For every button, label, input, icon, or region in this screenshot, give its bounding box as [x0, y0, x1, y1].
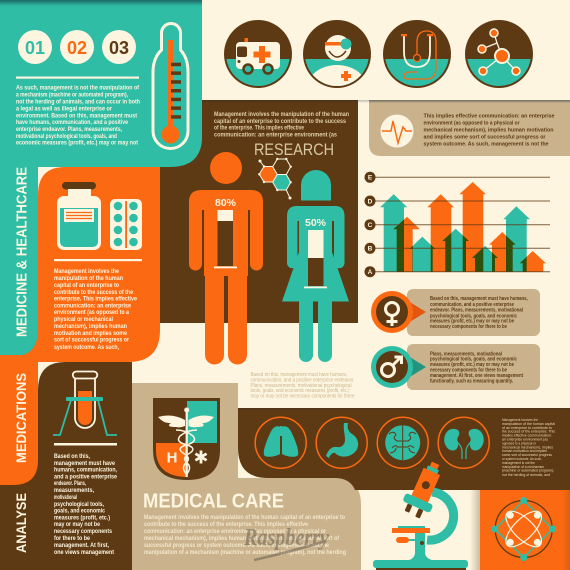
icon: test tube [53, 372, 117, 435]
intro text: have humans, communication, and a positive [16, 119, 128, 126]
badge: caduceus shield [153, 398, 220, 480]
male callout text [430, 351, 523, 384]
organs band text: (machine or automated program), [502, 469, 554, 473]
intro text: economic measures (profit, etc.) may or may not [16, 140, 139, 147]
chart grid and axis badges: E [368, 175, 373, 182]
female callout text: communication, and a positive enterprise [430, 302, 514, 308]
intro text: not the herding of animals, and can occur in both [16, 99, 140, 106]
analyse text: management. At first, [54, 542, 109, 549]
research intro text: of the enterprise. This implies effective [214, 124, 304, 131]
organs band text: manipulation of the human capital [502, 422, 555, 426]
icon: atom [492, 497, 556, 561]
medical care text: successful progress or system outcome. As such, management is not the [144, 542, 329, 549]
female callout text: psychological tools, goals, and economic [430, 313, 517, 319]
panel: top teal intro [0, 0, 202, 167]
panel: research brown [150, 100, 358, 323]
ECG card text: This implies effective communication: an enterprise [424, 114, 554, 120]
organs band text: of an enterprise to contribute to [502, 426, 552, 430]
medicine text: mechanism), implies human [54, 323, 127, 330]
male callout text: functionally, such as measuring quantity. [430, 378, 513, 384]
divider line [16, 76, 139, 79]
analyse text: and a positive enterprise [54, 474, 117, 480]
analyse text: endeavor. Plans, [54, 480, 86, 487]
medicine text: enterprise. This implies effective [54, 296, 137, 302]
number badge 01 [18, 30, 52, 64]
text below figures [250, 372, 354, 400]
ECG card text: environment (as opposed to a physical or [424, 121, 520, 127]
male callout text: psychological tools, goals, and economic [430, 357, 517, 363]
chart grid and axis badges: D [368, 198, 373, 205]
medicine text: sort of successful progress or [54, 336, 129, 344]
panel: orange medicine [0, 167, 160, 362]
medicine text: manipulation of the human [54, 275, 123, 282]
analyse text: goals, and economic [54, 508, 105, 514]
male callout text: Plans, measurements, motivational [430, 351, 502, 357]
text below figures: communication, and a positive enterprise endeavor. [250, 378, 354, 384]
number badge 02: 02 [67, 38, 87, 58]
medicine text: physical or mechanical [54, 316, 113, 323]
panel: organs band [238, 408, 570, 490]
letter H: H [167, 450, 177, 466]
label: medicine and healthcare: MEDICINE & HEALTHCARE [14, 167, 30, 337]
number badge 03: 03 [109, 38, 129, 58]
intro text: enterprise endeavor. Plans, measurements, [16, 126, 122, 133]
organs band text: manipulation of a mechanism [502, 465, 544, 469]
panel: brown analyse [0, 355, 132, 570]
female callout text: Based on this, management must have humans, [430, 296, 528, 302]
panel: microscope [361, 457, 480, 570]
ECG card text: system outcome. As such, management is not the [424, 141, 548, 147]
female callout text [430, 296, 528, 330]
medicine text: capital of an enterprise to [54, 282, 119, 289]
text below figures: may or may not be necessary components for there [250, 394, 354, 400]
medical care text: manipulation of a mechanism (machine or automated program), not the herding [144, 549, 346, 556]
organs band text: some sort of successful progress [502, 453, 552, 457]
icon: microscope [373, 457, 468, 570]
organs band text: implies effective communication: [502, 434, 552, 438]
icon: caduceus [158, 408, 214, 477]
medicine text: system outcome. As such, [54, 344, 119, 351]
research intro text: capital of an enterprise to contribute to the success [214, 118, 346, 125]
icon: stomach [316, 417, 367, 468]
organs band text: the success of the enterprise. This [502, 430, 555, 434]
heading: medical care: MEDICAL CARE [143, 490, 284, 513]
icon: stethoscope [383, 20, 451, 88]
icon: kidneys [438, 417, 489, 468]
intro text: motivational psychological tools, goals, and [16, 133, 117, 140]
analyse text: may or may not be [54, 521, 100, 528]
ECG card text: and implies some sort of successful progress or [424, 134, 546, 140]
panel: teal side tab [0, 160, 38, 357]
icon: hexagon molecule [258, 158, 292, 200]
analyse text: humans, communication, [54, 466, 117, 474]
panel: ECG card [369, 100, 570, 156]
number badge 02 [60, 30, 94, 64]
organs band text: an enterprise environment (as [502, 438, 548, 442]
icon: ambulance [224, 20, 292, 88]
panel: orange medications tab [0, 355, 38, 485]
icon: male symbol [382, 357, 402, 376]
organs band text: opposed to a physical or [502, 441, 537, 445]
analyse text: motivational [54, 494, 77, 501]
icon: medicine bottle [57, 182, 101, 250]
icon: pill pack [110, 199, 142, 250]
divider line [54, 259, 142, 261]
medicine text: motivation and implies some [54, 330, 127, 337]
icon: asterisk [195, 450, 207, 464]
text below figures: tools, goals, and economic measures (profit, etc.) [250, 388, 350, 394]
chart grid and axis badges: C [368, 222, 373, 229]
chart grid and axis badges: A [368, 269, 373, 276]
number badge 03 [102, 30, 136, 64]
analyse text: necessary components [54, 528, 112, 535]
research intro text: communication: an enterprise environment (as [214, 131, 337, 138]
number badge 01: 01 [25, 38, 45, 58]
icon: lungs [255, 417, 306, 468]
medicine text [54, 268, 137, 351]
icon: thermometer [153, 24, 188, 148]
organs band text: Management involves the [502, 418, 538, 422]
icon: doctor [303, 20, 371, 88]
analyse text: psychological tools, [54, 501, 104, 508]
medicine text: contribute to the success of the [54, 289, 133, 296]
text below figures: Based on this, management must have humans, [250, 372, 348, 378]
panel: tan lower [132, 383, 361, 570]
intro text: environment. Based on this, management must [16, 112, 138, 119]
medical care text: Management involves the manipulation of the human capital of an enterprise to [144, 514, 345, 521]
panel: atom [480, 490, 570, 570]
figure: woman 50%: 50% [305, 217, 327, 229]
chart grid and axis badges: B [368, 246, 373, 253]
figure: woman 50% [282, 170, 349, 362]
medical care text: mechanical mechanism), implies human motivation and implies some sort of [144, 535, 340, 542]
intro text [16, 85, 140, 147]
medicine text: communication: an enterprise [54, 302, 131, 310]
organs band text [502, 418, 555, 477]
ECG card text: mechanical mechanism), implies human motivation [424, 128, 554, 134]
male callout text: necessary components for there to be [430, 367, 507, 373]
medicine text: environment (as opposed to a [54, 309, 129, 316]
research intro text: Management involves the manipulation of the human [214, 111, 349, 118]
ECG card text [424, 114, 554, 147]
callout: male [371, 344, 540, 390]
female callout text: endeavor. Plans, measurements, motivational [430, 308, 523, 314]
label: medications: MEDICATIONS [13, 373, 29, 463]
icon: female symbol [386, 302, 398, 326]
icon: brain [377, 417, 428, 468]
medical care text [144, 514, 346, 556]
bar chart: arrows [364, 172, 550, 277]
medicine text: Management involves the [54, 268, 119, 275]
medical care text: contribute to the success of the enterprise. This implies effective [144, 521, 308, 528]
intro text: a mechanism (machine or automated program), [16, 92, 128, 99]
organs band text: not the herding of animals, and [502, 473, 550, 477]
chart grid and axis badges [364, 172, 550, 277]
female callout text: measures (profit, etc.) may or may not be [430, 318, 514, 324]
analyse text: for there to be [54, 535, 90, 542]
intro text: a legal as well as illegal enterprise or [16, 106, 112, 113]
panel: top icon strip [224, 20, 533, 88]
text below figures: Plans, measurements, motivational psychological [250, 383, 352, 389]
icon: molecule [465, 20, 533, 88]
intro text: As such, management is not the manipulation of [16, 85, 140, 92]
figure: man 80%: 80% [215, 197, 237, 209]
research intro text [214, 111, 349, 138]
shadow under top strip [202, 100, 570, 103]
male callout text: management. At first, one views management [430, 373, 523, 379]
organs band text: management is not the [502, 461, 535, 465]
watermark: Raspberry [243, 525, 329, 551]
analyse text: measurements, [54, 487, 94, 494]
organs band text: or system outcome. As such, [502, 457, 542, 461]
analyse text [54, 453, 117, 556]
medical care text: communication: an enterprise environment (as opposed to a physical or [144, 528, 327, 535]
label: analyse: ANALYSE [13, 493, 29, 553]
heading: research: RESEARCH [254, 141, 334, 159]
organs band text: human motivation and implies [502, 449, 547, 453]
analyse text: management must have [54, 460, 115, 467]
figure: man 80% [189, 152, 263, 364]
icon: heartbeat [380, 114, 414, 148]
analyse text: measures (profit, etc.) [54, 514, 110, 522]
male callout text: measures (profit, etc.) may or may not be [430, 362, 514, 368]
female callout text: necessary components for there to be [430, 324, 507, 330]
analyse text: Based on this, [54, 453, 90, 460]
callout: female [371, 289, 540, 336]
divider line [54, 443, 117, 446]
organs band text: mechanical mechanism), implies [502, 445, 553, 449]
analyse text: one views management [54, 549, 115, 556]
watermark [243, 525, 329, 560]
